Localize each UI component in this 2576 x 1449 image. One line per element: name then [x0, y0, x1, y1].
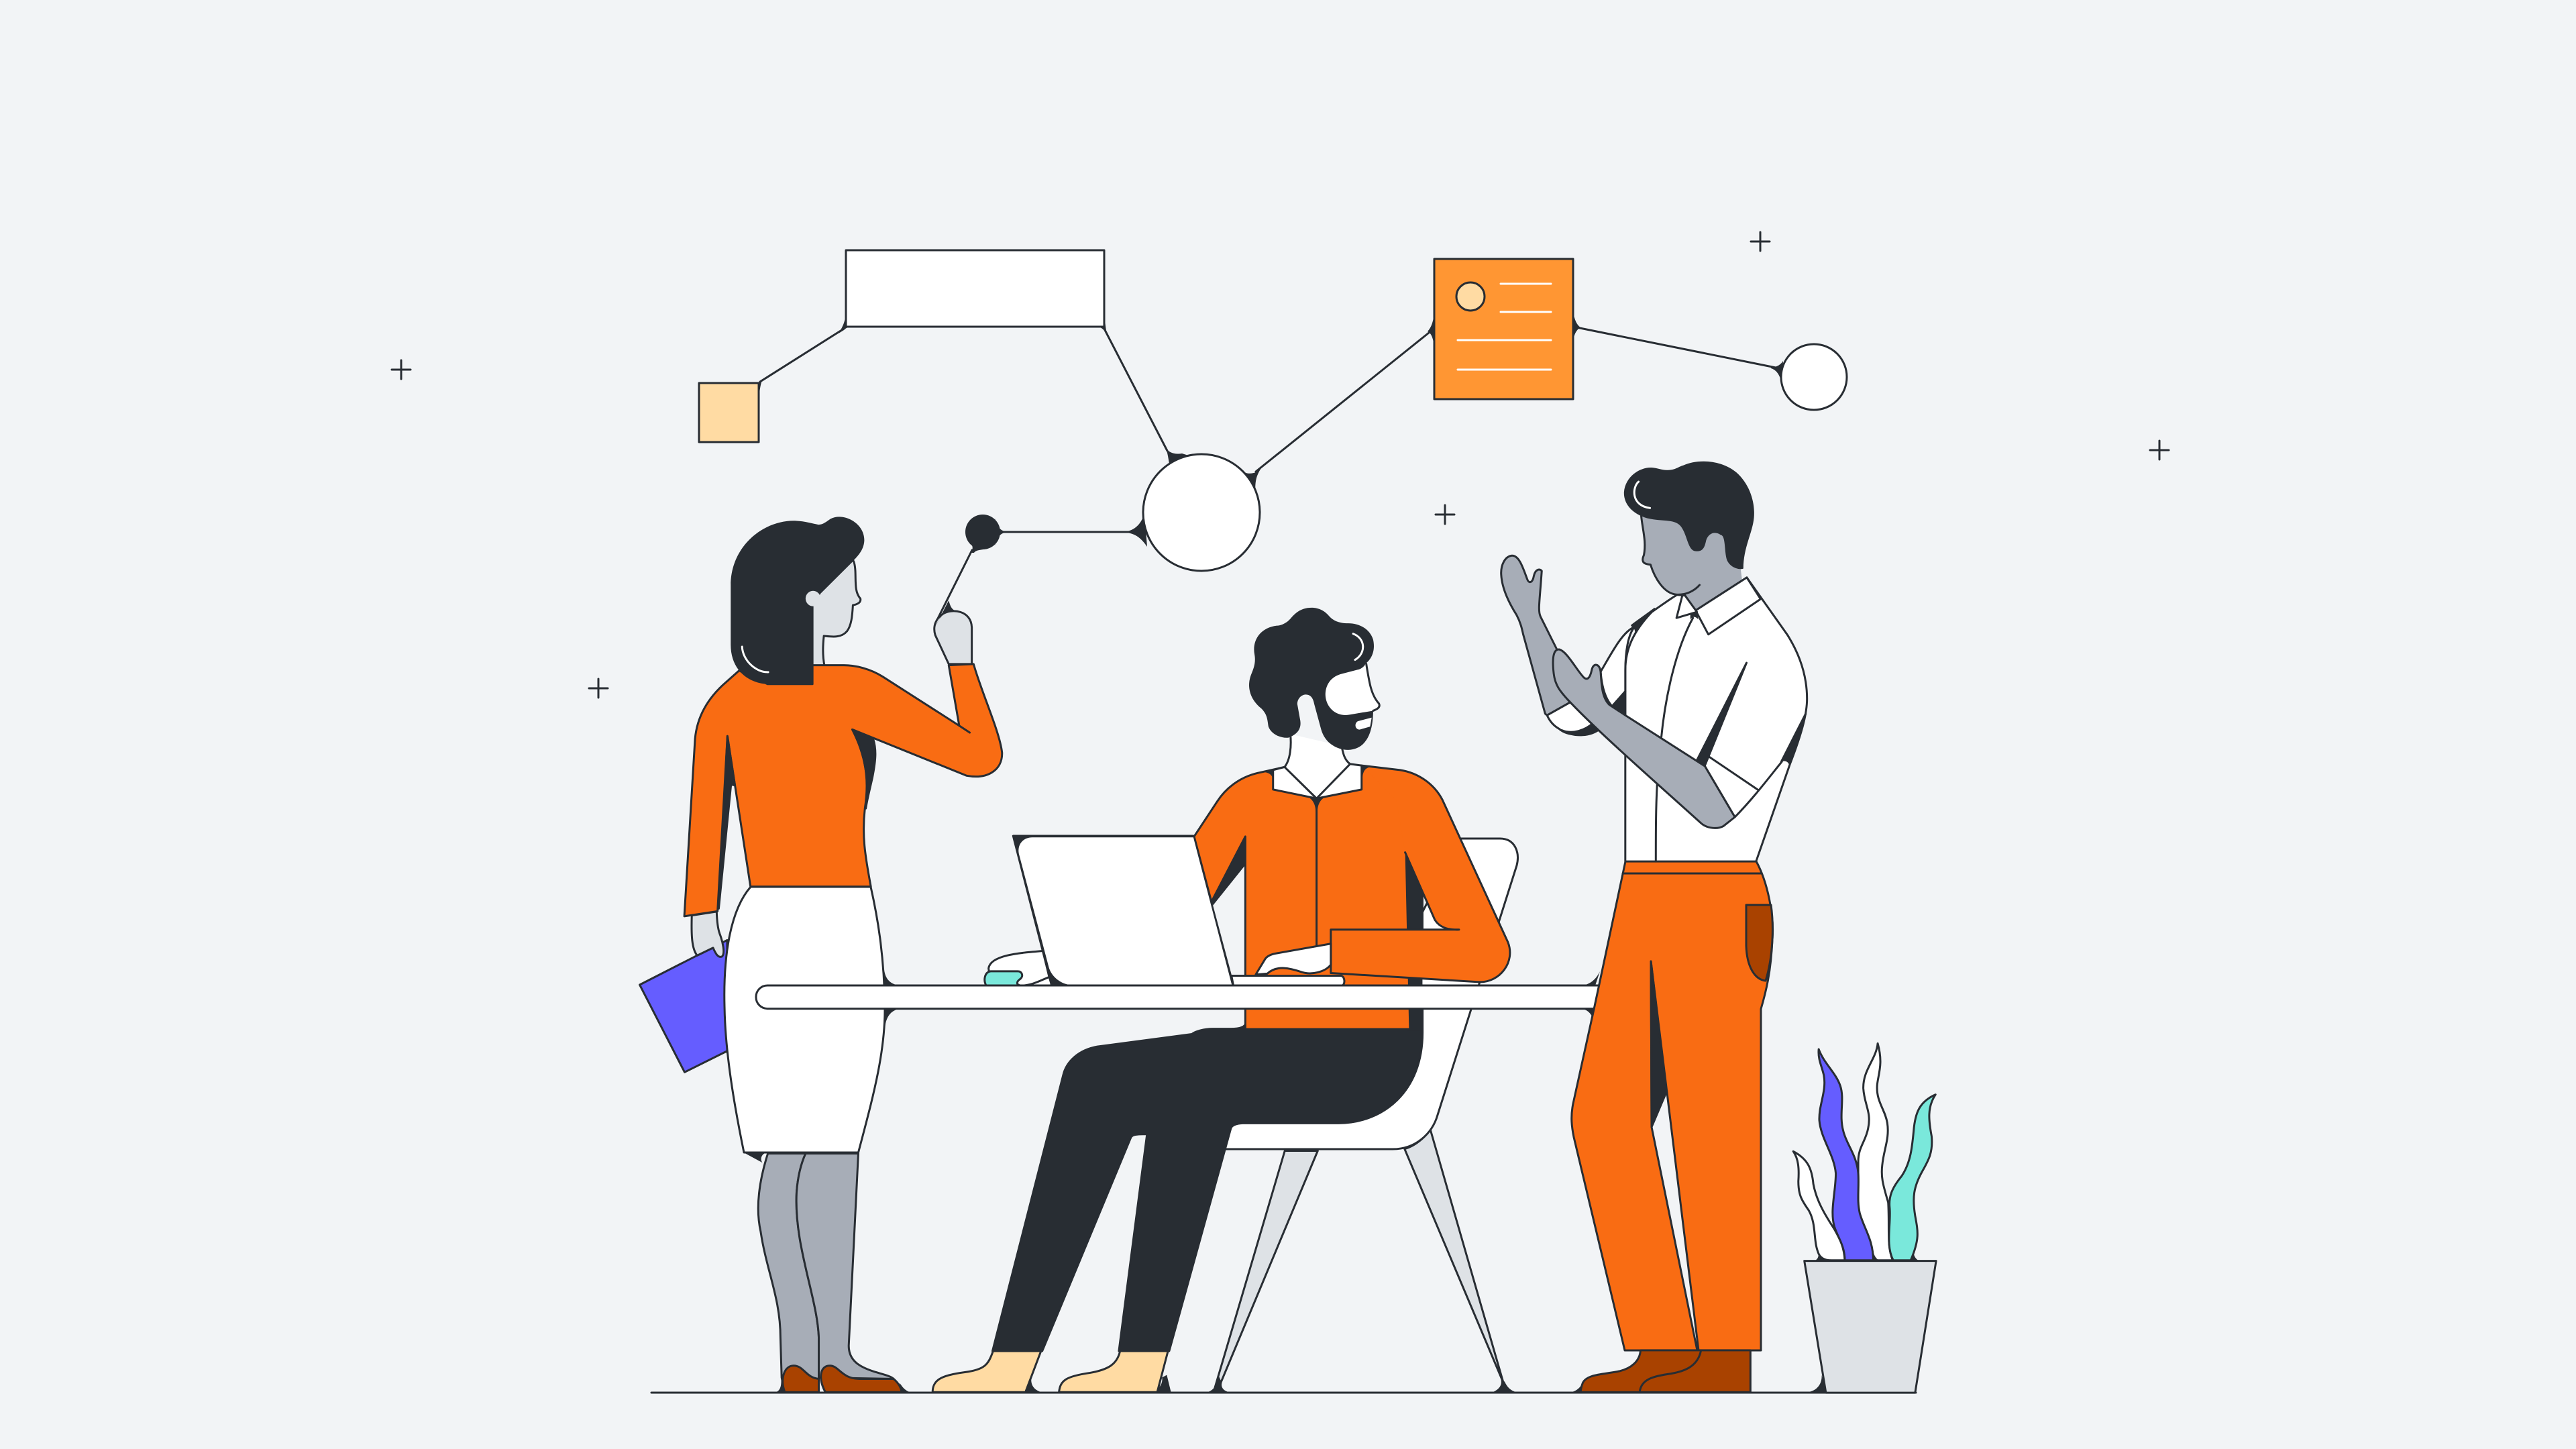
standing man back arm and hand — [1501, 555, 1571, 715]
laptop keyboard base — [1232, 976, 1344, 985]
seated man collar — [1263, 764, 1373, 812]
table — [756, 971, 1628, 1021]
man left hand on mouse — [989, 951, 1052, 985]
woman raised hand — [934, 611, 972, 664]
node: large white circle — [1143, 454, 1260, 571]
trouser pocket — [1746, 905, 1772, 981]
woman sweater — [684, 664, 1002, 916]
standing man hair — [1624, 462, 1754, 569]
network diagram of connected nodes — [699, 250, 1847, 624]
potted plant — [1793, 1043, 1936, 1393]
node: orange profile card — [1434, 259, 1573, 399]
seated man shoes — [932, 1351, 1168, 1392]
shirt front sleeve — [1705, 757, 1782, 817]
standing man — [1501, 462, 1807, 1392]
shirt fold creases — [1697, 663, 1747, 765]
seated man face — [1326, 663, 1379, 715]
plant leaf: teal — [1889, 1095, 1935, 1260]
standing man neck and face — [1642, 515, 1742, 610]
chair — [1026, 839, 1517, 1392]
woman legs — [744, 1152, 910, 1392]
shirt back sleeve — [1601, 627, 1635, 706]
plant pot — [1805, 1261, 1936, 1393]
clipboard folder — [640, 940, 727, 1072]
node: small white circle — [1781, 344, 1847, 410]
standing man front arm and hand — [1553, 649, 1735, 828]
woman standing — [640, 517, 1052, 1392]
seated man torso and arms — [1194, 608, 1510, 1030]
laptop — [1013, 836, 1234, 985]
woman shoes — [783, 1366, 902, 1392]
woman hand holding folder — [692, 912, 724, 957]
standing man boots — [1569, 1350, 1750, 1392]
chair legs — [1026, 1130, 1517, 1392]
seated man — [932, 608, 1510, 1392]
chair seat and back — [1225, 839, 1517, 1149]
node: peach square — [699, 383, 759, 442]
seated man neck — [1285, 734, 1350, 798]
computer mouse — [985, 971, 1022, 985]
woman underarm shadows — [718, 729, 875, 908]
woman neck and face — [812, 560, 861, 666]
standing man trousers — [1572, 861, 1773, 1350]
seated man smile — [1356, 718, 1372, 730]
plant leaf: purple — [1819, 1049, 1873, 1260]
seated man hair and beard — [1249, 608, 1374, 750]
shirt collar — [1696, 578, 1760, 635]
icon: sparkle plus signs — [392, 232, 2169, 698]
seated man hand on keyboard — [1256, 944, 1331, 975]
seated man trousers — [932, 1009, 1423, 1392]
plant leaf: short white — [1793, 1151, 1845, 1260]
plant leaf: tall white — [1858, 1043, 1892, 1260]
standing man shirt — [1625, 578, 1807, 861]
woman hair — [731, 517, 864, 684]
woman skirt — [724, 887, 885, 1152]
floor line — [651, 1391, 1916, 1394]
node: white rectangle — [846, 250, 1104, 327]
node: small dark circle — [965, 515, 1006, 553]
